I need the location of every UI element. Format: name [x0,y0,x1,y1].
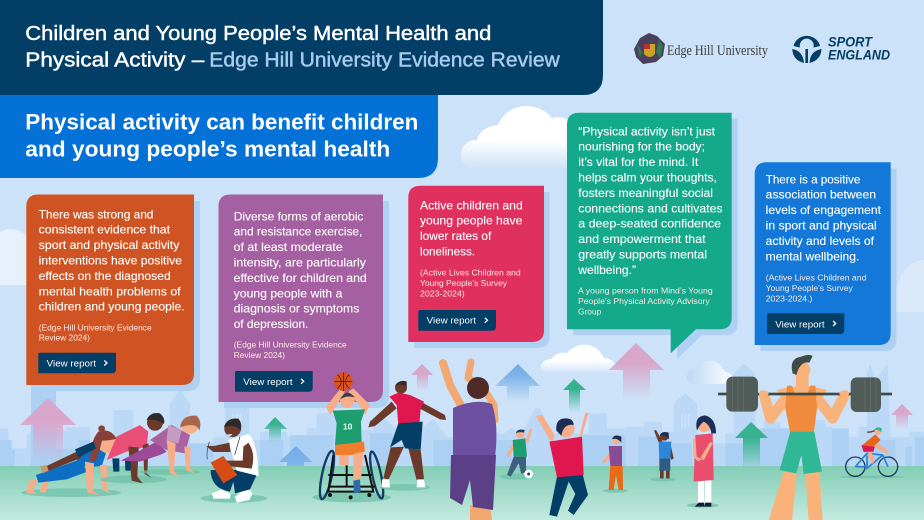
card text [420,198,523,258]
arrow: green centre [563,379,586,412]
card source: (Edge Hill University Evidence [39,322,152,332]
card source: (Edge Hill University Evidence [234,340,347,350]
subtitle panel [0,95,438,178]
arrow: blue left [279,446,312,497]
figure: man in red shirt [368,381,446,491]
quote attribution: A young person from Mind’s Young [578,285,713,295]
city skyline [0,387,462,466]
card text: activity and levels of [766,234,875,248]
card text: children and young people. [39,300,185,314]
card source: (Active Lives Children and [766,273,867,283]
quote text: and empowerment that [578,232,706,246]
figure: man in purple vest reaching up [443,362,496,520]
quote text: a deep-seated confidence [578,217,721,231]
card text: association between [766,188,876,202]
card text: Active children and [420,198,523,212]
arrow: green left [264,417,287,442]
subtitle text: and young people’s mental health [25,137,390,162]
figure: weightlifter with barbell [718,355,892,520]
card text: mental health problems of [39,284,181,298]
logo: Sport England [792,35,890,63]
card source [234,340,347,360]
card source [766,273,867,303]
arrow: pink left [20,398,76,463]
cloud right edge [895,260,924,312]
header title: Children and Young People’s Mental Health and [25,23,491,45]
panel: green quote bubble [567,113,738,359]
figure: man doing push-up [40,413,167,483]
header title [25,23,560,72]
card text: in sport and physical [766,218,877,232]
subtitle text: Physical activity can benefit children [25,109,418,134]
logo: Sport England: SPORT [828,35,874,50]
card source: (Active Lives Children and [420,268,521,278]
cloud right pale [687,360,735,384]
quote text: greatly supports mental [578,248,707,262]
quote text: fosters meaningful social [578,186,713,200]
quote text: connections and cultivates [578,201,723,215]
card text [39,207,185,314]
figure: jumping boy in red [536,413,589,517]
button: view report: View report [427,316,476,327]
card source: 2023-2024.) [766,293,812,303]
card text: consistent evidence that [39,223,171,237]
figure: woman in purple doing push-up [112,416,201,477]
figure: child in blue shirt [650,430,676,481]
panel: crimson evidence card [408,186,550,348]
card source: Young People’s Survey [766,283,853,293]
card text: loneliness. [420,244,475,258]
button: view report [38,353,116,373]
arrow: pink small [411,364,433,391]
card source: 2023-2024) [420,288,465,298]
header panel [0,0,603,95]
card text: There was strong and [39,207,153,221]
button: view report: View report [47,358,96,369]
card text: lower rates of [420,229,492,243]
card text: Diverse forms of aerobic [234,209,363,223]
header title: Physical Activity – [25,50,205,72]
arrow: pink big centre [609,343,664,399]
card text [234,209,367,331]
quote attribution: People’s Physical Activity Advisory [578,296,710,306]
button: view report [767,313,844,334]
button: view report: View report [243,377,293,388]
cloud centre small [541,345,619,373]
button: view report [418,310,496,331]
logo: Edge Hill University: Edge Hill University [667,43,769,59]
card source: Review 2024) [39,333,90,343]
card text: and resistance exercise, [234,225,362,239]
card text: sport and physical activity [39,238,179,252]
figure: wheelchair basketball player [312,372,391,502]
cloud left edge [0,229,30,285]
card text: of at least moderate [234,240,343,254]
card text [766,172,882,263]
quote text: helps calm your thoughts, [578,170,717,184]
subtitle text [25,109,418,162]
figure: child in orange trousers [602,435,628,493]
card source [420,268,521,298]
figure: coach with clipboard [201,419,267,503]
panel: purple evidence card [218,194,389,408]
button: view report [235,371,313,392]
figure: cyclist [839,427,905,478]
card text: interventions have positive [39,254,182,268]
panel: blue evidence card [755,162,896,351]
card text: There is a positive [766,172,861,186]
card text: effective for children and [234,271,367,285]
quote attribution: Group [578,307,601,317]
figure: girl in red dress [687,415,719,508]
card text: effects on the diagnosed [39,269,171,283]
card text: of depression. [234,317,308,331]
figure: wheelchair basketball player: 10 [343,421,353,431]
card text: levels of engagement [766,203,882,217]
card source: Review 2024) [234,350,285,360]
button: view report: View report [775,319,825,330]
card text: intensity, are particularly [234,256,366,270]
quote text: it’s vital for the mind. It [578,155,699,169]
people group left [21,372,446,503]
people group right [500,355,905,520]
card text: young people have [420,214,523,228]
arrow: pink right [891,404,913,429]
panel: orange evidence card [26,194,200,391]
header title: Edge Hill University Evidence Review [209,50,560,72]
figure: boy with football [500,428,534,480]
quote text [577,124,723,277]
ground [0,466,924,520]
card text: young people with a [234,286,343,300]
cloud top centre [461,106,572,168]
card source: Young People’s Survey [420,278,508,288]
card source [39,322,152,343]
city skyline right [462,363,924,466]
quote text: “Physical activity isn’t just [578,124,716,138]
quote attribution [578,285,713,317]
card text: mental wellbeing. [766,249,859,263]
arrow: blue centre [495,364,540,402]
quote text: wellbeing.” [577,263,636,277]
quote text: nourishing for the body; [578,140,705,154]
logo: Sport England: ENGLAND [828,48,890,63]
arrow: green right [735,422,768,474]
logo: Edge Hill University [634,33,769,64]
card text: diagnosis or symptoms [234,302,359,316]
figure: woman doing push-up [21,425,121,497]
